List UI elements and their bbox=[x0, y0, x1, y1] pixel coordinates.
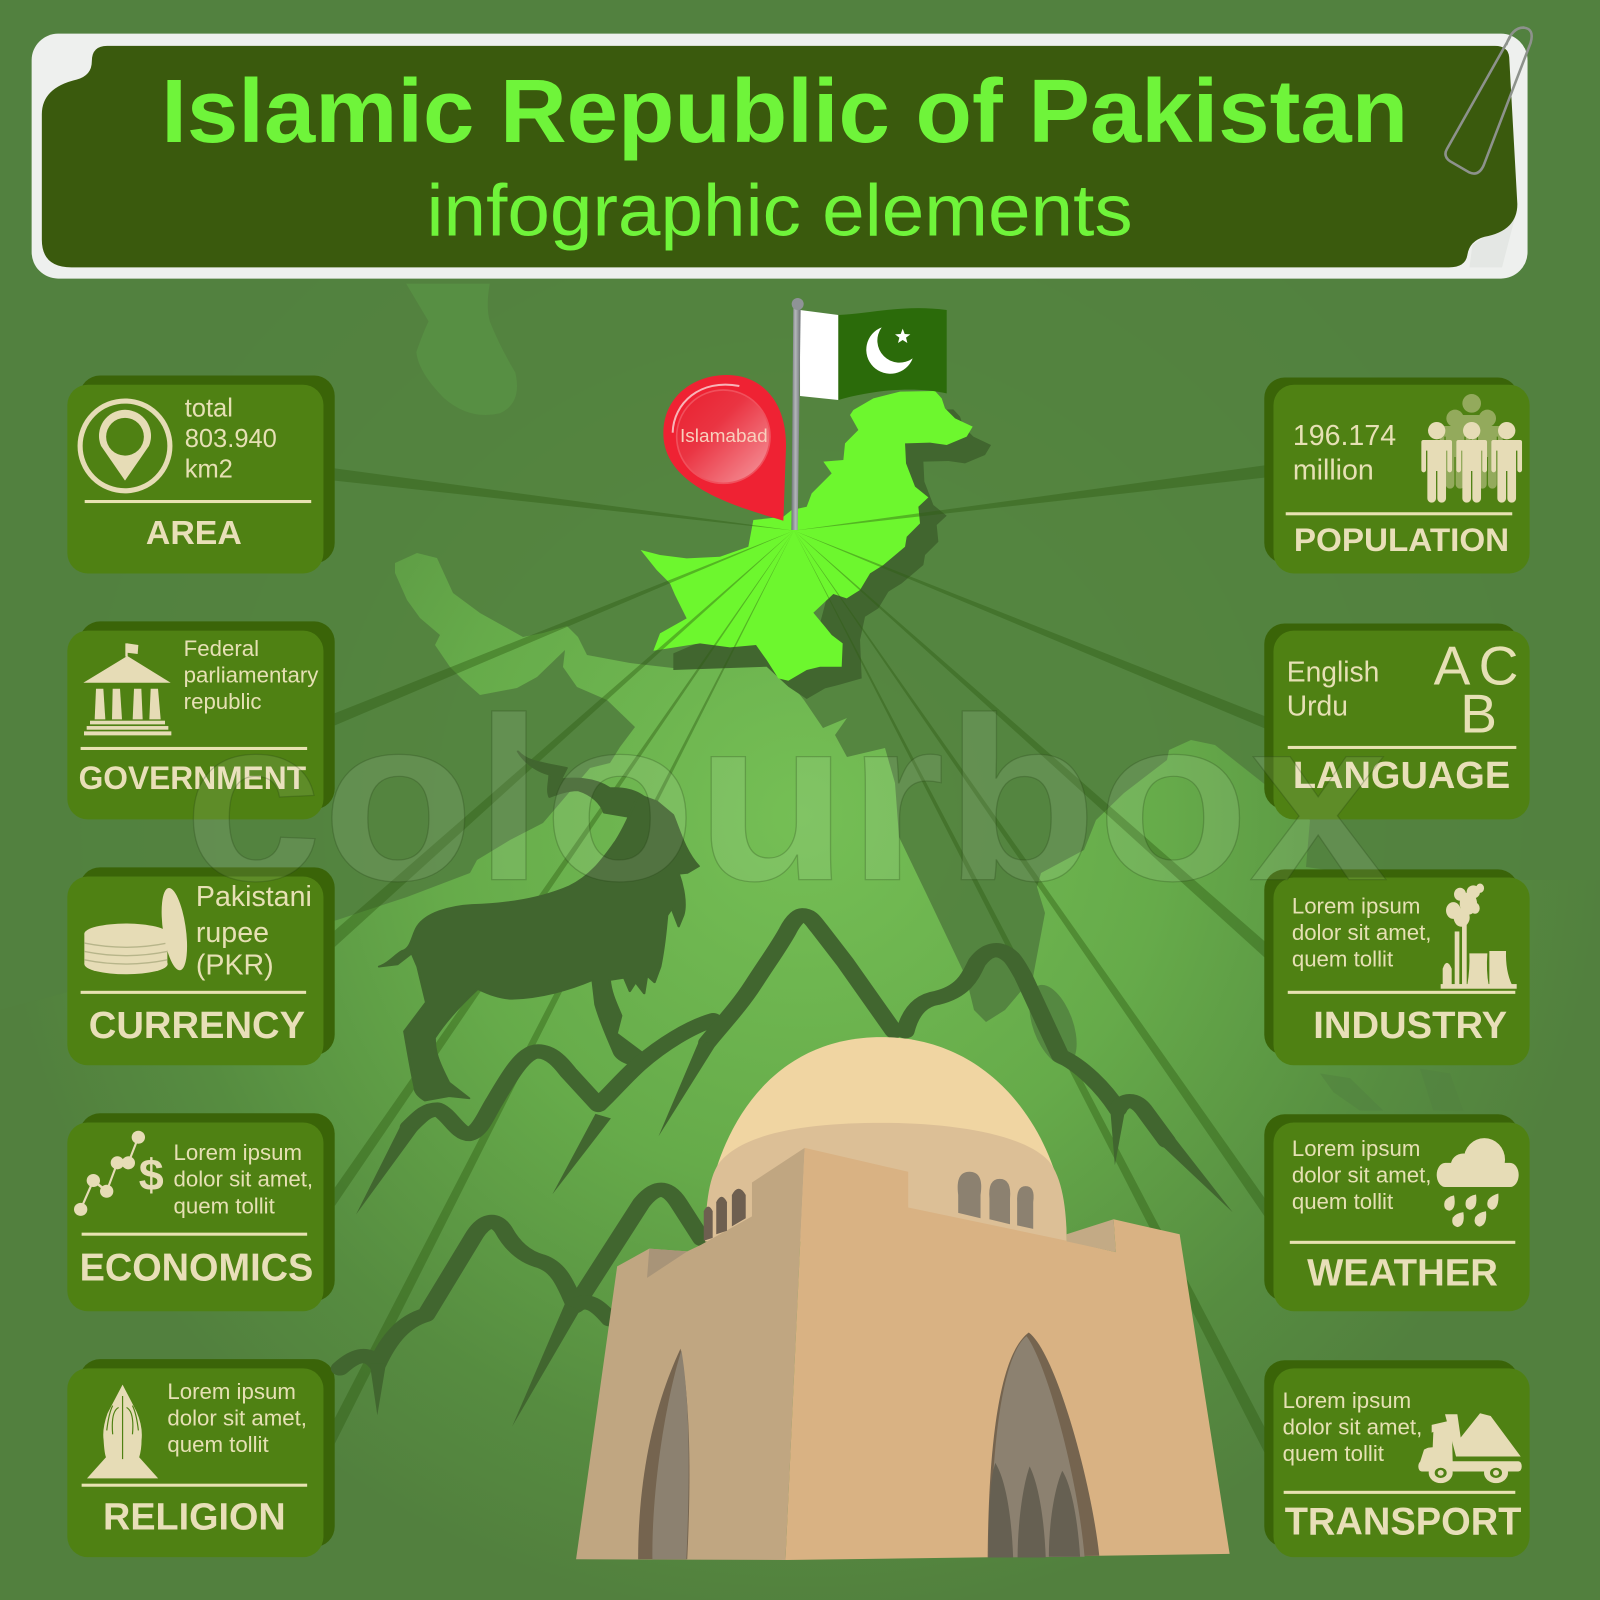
left arch bbox=[638, 1349, 689, 1559]
markhor goat silhouette bbox=[379, 751, 699, 1101]
capital label: Islamabad bbox=[680, 426, 768, 446]
title banner bbox=[32, 28, 1532, 279]
icon: dump truck bbox=[1418, 1413, 1522, 1483]
subtitle: infographic elements bbox=[427, 169, 1133, 252]
language value bbox=[1287, 656, 1379, 721]
goat body bbox=[379, 795, 699, 1101]
card: economics bbox=[67, 1113, 335, 1311]
card: weather bbox=[1264, 1114, 1530, 1311]
flag pole bbox=[791, 307, 801, 530]
capital map pin bbox=[663, 375, 786, 521]
industry text: Lorem ipsum bbox=[1292, 893, 1420, 918]
icon: location pin in circle bbox=[80, 401, 170, 491]
currency value bbox=[196, 881, 312, 981]
map: Pakistan drop shadow bbox=[673, 409, 991, 699]
icon: rising chart and dollar bbox=[74, 1131, 164, 1216]
flag of Pakistan on pole bbox=[791, 298, 947, 530]
dome bbox=[705, 1037, 1067, 1241]
weather label: WEATHER bbox=[1307, 1252, 1498, 1294]
icon: praying hands bbox=[87, 1385, 158, 1478]
weather text: quem tollit bbox=[1292, 1189, 1394, 1214]
industry text bbox=[1292, 893, 1431, 971]
inner arches bbox=[989, 1463, 1080, 1558]
card: language bbox=[1264, 623, 1530, 819]
card: transport bbox=[1264, 1360, 1530, 1557]
icon: people group bbox=[1421, 394, 1522, 503]
weather text bbox=[1292, 1136, 1431, 1214]
religion text: dolor sit amet, bbox=[167, 1406, 307, 1431]
icon: crescent and star bbox=[866, 327, 913, 374]
icon: letters bbox=[1434, 635, 1518, 745]
transport text: dolor sit amet, bbox=[1283, 1415, 1422, 1440]
banner curl shade bbox=[1469, 216, 1515, 267]
industry label: INDUSTRY bbox=[1313, 1004, 1507, 1046]
population value bbox=[1293, 420, 1396, 487]
map: Pakistan bbox=[641, 391, 973, 681]
banner white sticker bbox=[32, 34, 1528, 279]
transport text bbox=[1283, 1388, 1422, 1466]
mountain ridges bbox=[340, 915, 1233, 1426]
right small windows bbox=[958, 1172, 1034, 1229]
currency value: rupee bbox=[196, 917, 269, 949]
card: industry bbox=[1264, 869, 1530, 1065]
language value: Urdu bbox=[1287, 689, 1348, 721]
economics label: ECONOMICS bbox=[80, 1247, 313, 1290]
icon: letters: C bbox=[1479, 635, 1518, 697]
industry text: quem tollit bbox=[1292, 946, 1394, 971]
icon: letters: B bbox=[1460, 683, 1497, 745]
religion text bbox=[167, 1379, 307, 1457]
religion label: RELIGION bbox=[103, 1496, 286, 1538]
left wall bbox=[576, 1148, 805, 1560]
currency label: CURRENCY bbox=[89, 1004, 305, 1046]
economics text: quem tollit bbox=[173, 1193, 276, 1218]
weather text: Lorem ipsum bbox=[1292, 1136, 1420, 1161]
population value: million bbox=[1293, 455, 1374, 487]
right wall bbox=[785, 1148, 1230, 1560]
weather text: dolor sit amet, bbox=[1292, 1163, 1431, 1188]
banner dark panel bbox=[42, 46, 1517, 267]
connector rays from capital to cards bbox=[335, 465, 1265, 1454]
icon: parliament building bbox=[83, 643, 171, 735]
economics text bbox=[173, 1140, 313, 1218]
icon: rain cloud bbox=[1437, 1138, 1519, 1227]
transport text: quem tollit bbox=[1283, 1441, 1385, 1466]
population label: POPULATION bbox=[1294, 521, 1509, 558]
government value bbox=[184, 636, 319, 714]
icon: paper clip bbox=[1445, 28, 1532, 174]
language label: LANGUAGE bbox=[1293, 754, 1510, 796]
icon: coins bbox=[84, 885, 192, 974]
population value: 196.174 bbox=[1293, 420, 1396, 452]
currency value: (PKR) bbox=[196, 949, 274, 981]
icon: letters: A bbox=[1434, 635, 1471, 697]
watermark: colourbox bbox=[184, 670, 1388, 930]
area label: AREA bbox=[146, 515, 242, 552]
card: government bbox=[67, 621, 335, 819]
economics text: dolor sit amet, bbox=[173, 1167, 313, 1192]
transport label: TRANSPORT bbox=[1285, 1501, 1522, 1544]
area value: km2 bbox=[185, 456, 233, 484]
goat horn bbox=[518, 751, 644, 817]
currency value: Pakistani bbox=[196, 881, 312, 913]
card: population bbox=[1264, 378, 1530, 573]
card: area bbox=[67, 376, 335, 573]
dome lower band bbox=[705, 1123, 1067, 1241]
area value bbox=[185, 394, 277, 484]
area value: total bbox=[185, 394, 233, 422]
transport text: Lorem ipsum bbox=[1283, 1388, 1411, 1413]
title heading: Islamic Republic of Pakistan bbox=[161, 62, 1408, 162]
government label: GOVERNMENT bbox=[79, 759, 306, 796]
right arch bbox=[988, 1332, 1099, 1558]
government value: republic bbox=[184, 689, 262, 714]
language value: English bbox=[1287, 656, 1379, 688]
card: currency bbox=[67, 867, 335, 1065]
background map: Caspian sea bbox=[406, 284, 517, 415]
government value: Federal bbox=[184, 636, 259, 661]
area value: 803.940 bbox=[185, 425, 277, 453]
religion text: Lorem ipsum bbox=[167, 1379, 296, 1404]
industry text: dolor sit amet, bbox=[1292, 920, 1431, 945]
icon: rising chart and dollar: $ bbox=[139, 1149, 164, 1200]
corner notches bbox=[647, 1249, 687, 1278]
left small windows bbox=[704, 1189, 746, 1241]
icon: factory with smoke bbox=[1441, 884, 1517, 989]
mausoleum landmark bbox=[576, 1037, 1230, 1560]
government value: parliamentary bbox=[184, 663, 319, 688]
background map: island shapes bbox=[1320, 1069, 1463, 1111]
religion text: quem tollit bbox=[167, 1432, 270, 1457]
card: religion bbox=[67, 1359, 335, 1557]
economics text: Lorem ipsum bbox=[173, 1140, 302, 1165]
